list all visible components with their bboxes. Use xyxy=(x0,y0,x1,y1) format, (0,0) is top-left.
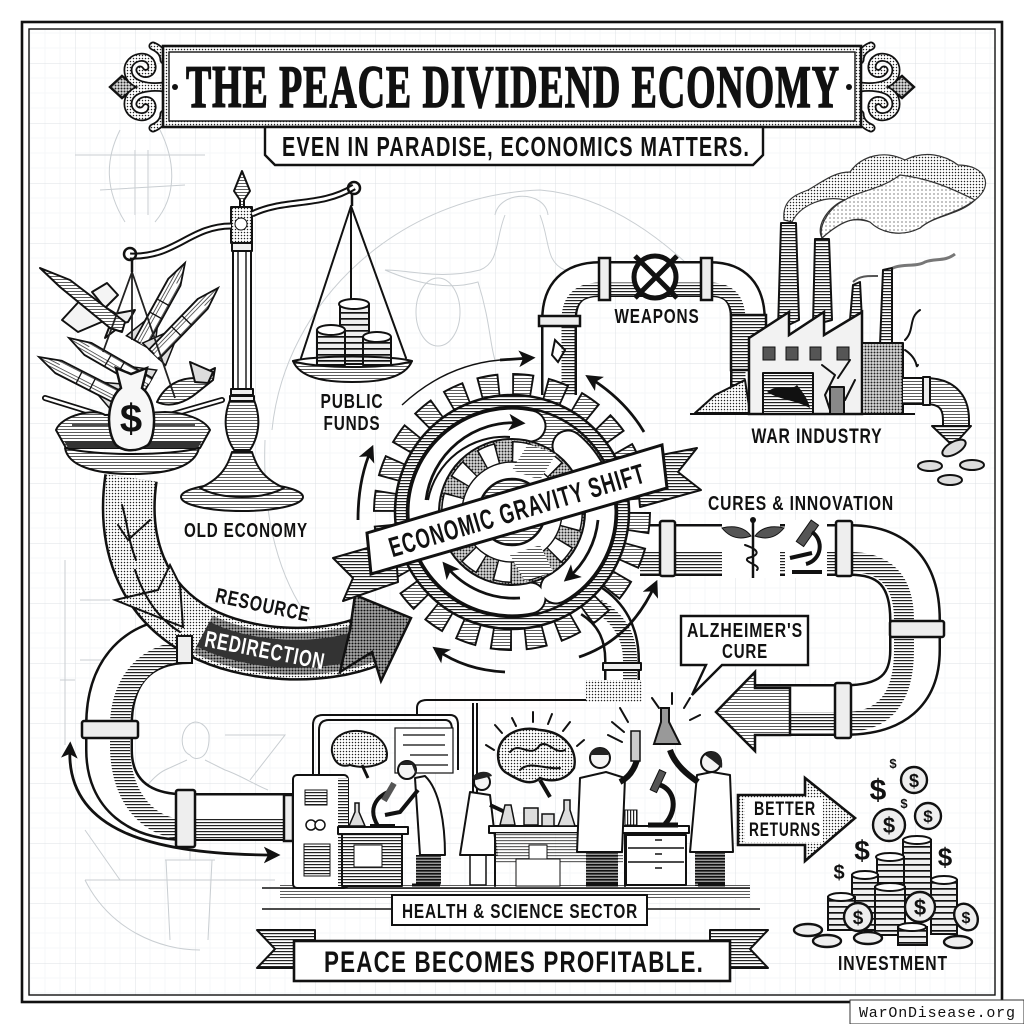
coin dollar glyphs: $ xyxy=(853,908,864,929)
dollar signs: $ xyxy=(870,774,887,807)
pipe shading xyxy=(568,289,739,400)
brain on screen xyxy=(332,731,387,778)
dollar signs: $ xyxy=(938,842,953,872)
flow arrows around gear xyxy=(70,358,655,855)
title banner xyxy=(110,46,914,128)
ribbon right tail xyxy=(636,448,701,507)
rays around tube and flask xyxy=(608,693,700,742)
outlet pipe xyxy=(903,377,971,446)
scientist raising test tube xyxy=(577,731,640,885)
coin dollar glyphs: $ xyxy=(914,895,926,920)
gear teeth fill xyxy=(388,388,636,636)
scientist with flask xyxy=(460,772,505,885)
icon: microscope xyxy=(785,520,827,578)
windows xyxy=(763,347,849,360)
bottom ribbon xyxy=(257,930,768,981)
coin stacks xyxy=(828,840,957,945)
icon: bomb xyxy=(157,362,215,405)
floor line xyxy=(262,888,760,909)
dollar signs: $ xyxy=(833,862,845,884)
scientist raising flask xyxy=(670,750,733,886)
pipe collars xyxy=(539,258,766,370)
inner gear disc xyxy=(462,462,562,562)
investment label: INVESTMENT xyxy=(838,953,948,975)
arrow band dark core xyxy=(203,634,372,654)
spokes over stipple xyxy=(510,444,556,581)
second desk xyxy=(489,826,689,886)
hub xyxy=(479,479,545,545)
falling coins xyxy=(918,436,984,485)
loading door xyxy=(763,373,813,414)
collar over arrow xyxy=(177,636,192,663)
arrow head xyxy=(340,595,411,681)
scale beam xyxy=(124,182,360,272)
arrow band stipple xyxy=(129,478,372,654)
public funds pan xyxy=(293,206,412,382)
pan strings xyxy=(103,272,175,398)
right annex xyxy=(862,343,903,414)
gear windows outline xyxy=(424,424,600,600)
better returns arrow: BETTER xyxy=(754,799,816,820)
public funds label xyxy=(320,391,384,435)
investment coins and dollars xyxy=(794,756,983,948)
weapons label: WEAPONS xyxy=(614,306,700,328)
loose coins xyxy=(794,767,983,948)
redirection label: REDIRECTION xyxy=(203,626,327,674)
old economy label: OLD ECONOMY xyxy=(184,520,308,542)
first desk xyxy=(338,827,408,886)
curved redirection arrow xyxy=(115,478,411,681)
icon: pipe crack xyxy=(552,340,565,362)
gear windows fill xyxy=(424,424,600,600)
rubble xyxy=(695,380,750,413)
coin dollar glyphs: $ xyxy=(962,910,971,927)
ribbon body xyxy=(367,445,667,574)
cures and innovation pipe xyxy=(640,521,944,751)
coin dollar glyphs: $ xyxy=(883,813,895,838)
watermark xyxy=(850,1000,1024,1024)
lower left pipe xyxy=(82,640,293,847)
watermark: WarOnDisease.org xyxy=(859,1005,1015,1022)
scientist at microscope xyxy=(385,761,445,885)
scale column xyxy=(230,171,254,401)
stack tops xyxy=(828,836,957,931)
icon: money bag: $ xyxy=(120,397,142,441)
pipe arrow head xyxy=(716,672,790,751)
war industry label: WAR INDUSTRY xyxy=(752,425,882,448)
title end dots xyxy=(172,84,852,90)
subtitle box xyxy=(265,127,763,165)
main building xyxy=(749,312,862,414)
faint anatomical sketches xyxy=(60,130,685,950)
cracks xyxy=(822,310,920,410)
weapons pile xyxy=(32,255,230,474)
left pan xyxy=(65,448,199,474)
icon: fighter jet xyxy=(40,268,135,338)
icon: caduceus xyxy=(722,517,784,578)
better returns arrow xyxy=(738,778,855,861)
icon: tanks xyxy=(45,398,222,448)
inner stipple ring xyxy=(439,439,585,585)
small pipe from gear to lab xyxy=(586,600,642,702)
alzheimers cure callout: ALZHEIMER'S xyxy=(687,620,803,642)
icon: crossed-out weapons symbol xyxy=(634,256,677,298)
ribbon left tail xyxy=(333,540,398,601)
glowing central brain xyxy=(486,712,584,797)
gear body rim xyxy=(395,395,629,629)
weapons pipe xyxy=(539,258,766,400)
microscope on second desk xyxy=(625,770,678,825)
dollar signs: $ xyxy=(900,796,908,811)
icon: left ornament scroll xyxy=(110,46,165,128)
arrow band outline xyxy=(129,478,372,654)
health and science lab scene xyxy=(262,693,760,909)
war industry factory xyxy=(690,155,986,485)
title inner panel xyxy=(169,52,855,121)
dollar signs: $ xyxy=(854,835,870,866)
cures label: CURES & INNOVATION xyxy=(708,493,894,515)
health and science sector label xyxy=(392,895,647,925)
ground xyxy=(690,413,915,415)
raised flask xyxy=(654,708,680,744)
dollar signs: $ xyxy=(889,756,897,771)
inner circulating arrows xyxy=(426,423,598,598)
health and science sector label: HEALTH & SCIENCE SECTOR xyxy=(402,901,638,923)
public funds label: PUBLIC xyxy=(320,391,384,413)
ribbon body xyxy=(294,941,730,981)
coin dollar glyphs xyxy=(853,771,971,929)
pipe collars xyxy=(82,721,293,847)
small door xyxy=(830,387,844,414)
smoke clouds xyxy=(784,155,986,282)
subtitle box: EVEN IN PARADISE, ECONOMICS MATTERS. xyxy=(282,131,750,162)
alzheimers cure callout xyxy=(681,616,808,695)
flask and microscope on first desk xyxy=(349,782,397,826)
resource label: RESOURCE xyxy=(213,584,312,627)
alzheimers cure callout: CURE xyxy=(722,641,768,663)
coin dollar glyphs: $ xyxy=(923,807,933,826)
gear face spokes xyxy=(407,407,617,617)
chart document xyxy=(395,728,453,773)
title plate xyxy=(163,46,861,127)
pipe collars xyxy=(660,521,944,738)
balance scale xyxy=(32,171,412,511)
economic gravity shift ribbon xyxy=(333,445,701,601)
dollar signs xyxy=(833,756,953,884)
icon: missiles xyxy=(32,255,230,413)
lab machine xyxy=(293,775,348,888)
glassware on second desk xyxy=(500,800,575,826)
arrow barb xyxy=(115,565,183,627)
ribbon right tail xyxy=(710,930,768,968)
icon: money bag xyxy=(109,368,154,450)
scale base xyxy=(181,400,303,511)
ribbon left tail xyxy=(257,930,315,968)
chimneys xyxy=(778,223,892,345)
icon: right ornament scroll xyxy=(859,46,914,128)
arrow band dark section xyxy=(203,634,372,654)
inner chevrons xyxy=(118,505,180,632)
better returns arrow: RETURNS xyxy=(749,820,821,841)
ribbon text: ECONOMIC GRAVITY SHIFT xyxy=(385,458,649,563)
pipe shading xyxy=(640,562,904,722)
central gear xyxy=(388,388,636,636)
floor shading xyxy=(280,885,750,899)
gear teeth outline xyxy=(388,388,636,636)
lab walls and frames xyxy=(313,700,586,825)
coin dollar glyphs: $ xyxy=(909,771,919,791)
public funds label: FUNDS xyxy=(324,413,380,435)
inner gear teeth xyxy=(452,452,572,572)
ribbon text: PEACE BECOMES PROFITABLE. xyxy=(324,946,704,979)
pipe shading xyxy=(120,651,292,829)
